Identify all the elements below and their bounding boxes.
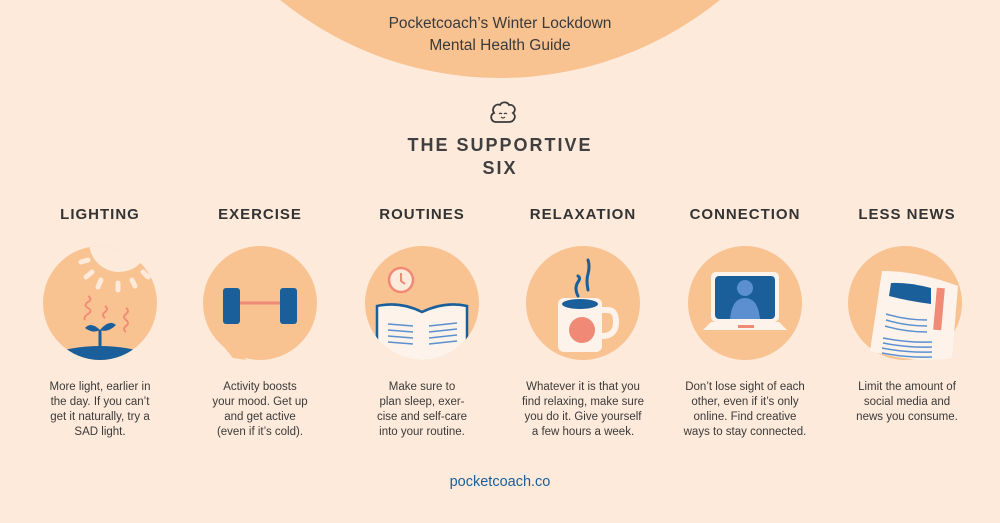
text: relaxation: a few hours a week. bbox=[532, 426, 634, 438]
main title: SIX bbox=[482, 158, 518, 178]
text: relaxation: Whatever it is that you bbox=[526, 381, 640, 393]
text: CONNECTION bbox=[690, 206, 800, 223]
text: routines bbox=[377, 381, 467, 438]
headings: LIGHTING bbox=[60, 206, 140, 223]
text: relaxation: find relaxing, make sure bbox=[522, 396, 644, 408]
text: lighting: the day. If you can’t bbox=[51, 396, 149, 408]
header title: Pocketcoach’s Winter Lockdown bbox=[389, 15, 611, 32]
header title bbox=[389, 15, 611, 54]
icon: relaxation bbox=[526, 246, 640, 360]
text: lighting: More light, earlier in bbox=[50, 381, 150, 393]
main title bbox=[407, 135, 593, 178]
text: RELAXATION bbox=[530, 206, 636, 223]
icon: news bbox=[848, 246, 962, 360]
footer link: pocketcoach.co bbox=[450, 474, 550, 490]
text: lighting: SAD light. bbox=[74, 426, 126, 438]
text: lighting bbox=[50, 381, 150, 438]
text: connection bbox=[684, 381, 806, 438]
icon: routines bbox=[365, 246, 479, 360]
text: exercise: (even if it’s cold). bbox=[217, 426, 303, 438]
top half circle bbox=[151, 0, 849, 78]
text: routines: cise and self-care bbox=[377, 411, 467, 423]
text: connection: other, even if it’s only bbox=[691, 396, 799, 408]
text: EXERCISE bbox=[218, 206, 302, 223]
text: exercise: and get active bbox=[224, 411, 296, 423]
text: news bbox=[856, 381, 958, 423]
text: news: social media and bbox=[864, 396, 950, 408]
text: exercise: your mood. Get up bbox=[212, 396, 308, 408]
icon: logo bbox=[490, 102, 516, 123]
icon: connection bbox=[688, 246, 802, 360]
icon: lighting bbox=[43, 246, 157, 360]
header title: Mental Health Guide bbox=[429, 37, 571, 54]
text: connection: Don’t lose sight of each bbox=[685, 381, 805, 393]
text: ROUTINES bbox=[379, 206, 465, 223]
text: routines: plan sleep, exer- bbox=[379, 396, 465, 408]
text: relaxation: you do it. Give yourself bbox=[524, 411, 641, 423]
text: news: Limit the amount of bbox=[858, 381, 956, 393]
text: connection: online. Find creative bbox=[694, 411, 796, 423]
text: routines: into your routine. bbox=[379, 426, 465, 438]
icon: exercise bbox=[203, 246, 317, 360]
text: lighting: get it naturally, try a bbox=[50, 411, 150, 423]
text: LESS NEWS bbox=[858, 206, 956, 223]
main title: THE SUPPORTIVE bbox=[407, 135, 593, 155]
text: connection: ways to stay connected. bbox=[684, 426, 806, 438]
text: exercise: Activity boosts bbox=[223, 381, 297, 393]
text: news: news you consume. bbox=[856, 411, 958, 423]
text: exercise bbox=[212, 381, 308, 438]
text: routines: Make sure to bbox=[389, 381, 455, 393]
text: relaxation bbox=[522, 381, 644, 438]
